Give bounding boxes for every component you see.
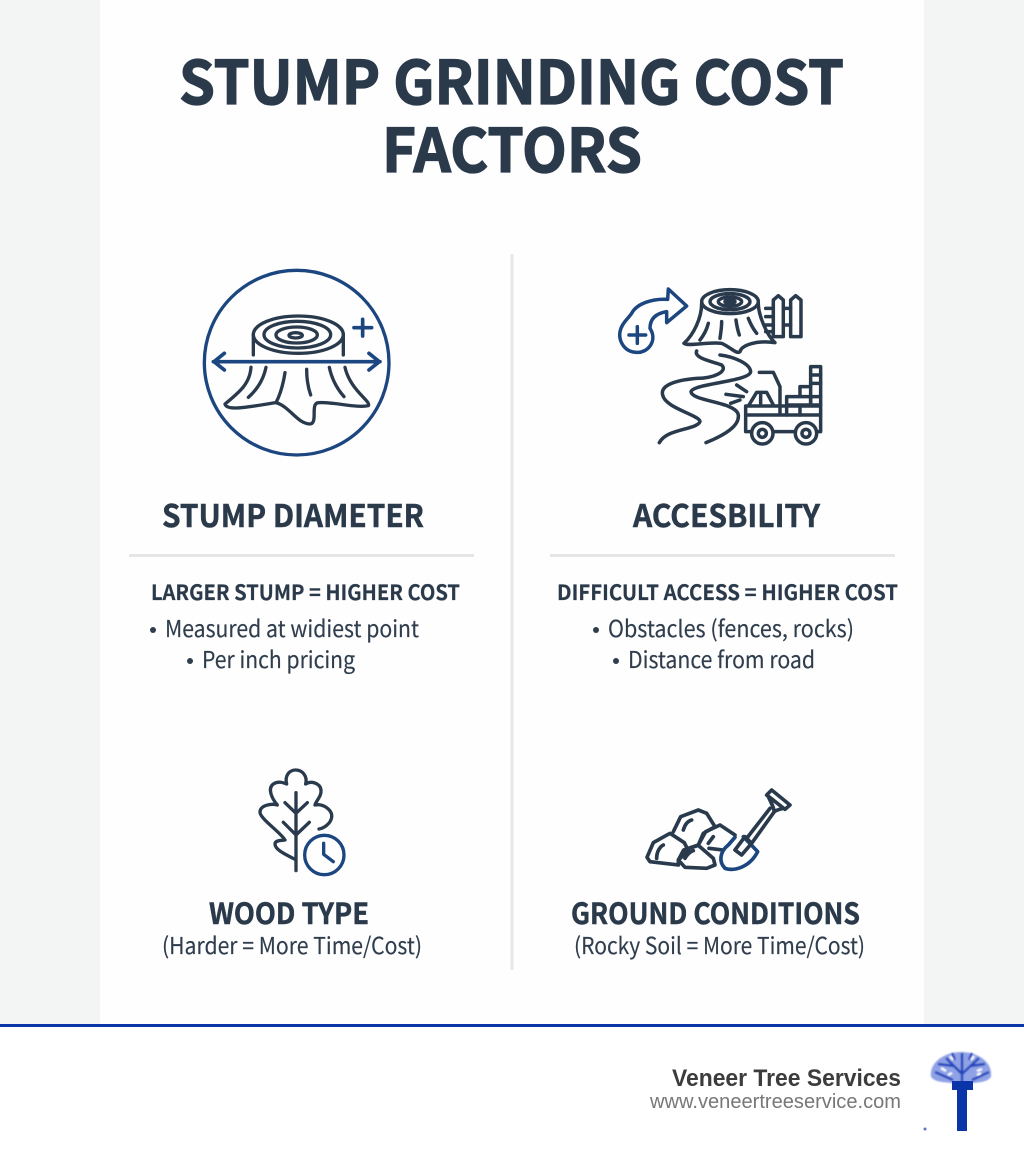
panel: stump diameter xyxy=(129,270,474,675)
title: STUMP GRINDING COST xyxy=(179,35,844,122)
icon: oak leaf with clock xyxy=(260,770,344,875)
icon: winding road, stump and truck xyxy=(620,289,821,444)
bullet list: stump diameter xyxy=(150,610,419,675)
title: FACTORS xyxy=(382,103,642,190)
heading: wood type: WOOD TYPE xyxy=(209,891,369,933)
icon: stump with diameter arrow xyxy=(204,270,389,455)
logo: blue tree xyxy=(924,1052,991,1131)
bullet list: accessibility xyxy=(593,610,854,675)
caption: wood type: (Harder = More Time/Cost) xyxy=(162,927,422,961)
heading: ground conditions: GROUND CONDITIONS xyxy=(571,891,860,933)
subheading: difficult access: DIFFICULT ACCESS = HIGHER COST xyxy=(557,577,898,607)
heading: accessibility: ACCESBILITY xyxy=(632,491,821,536)
footer xyxy=(0,1024,1024,1131)
subheading: larger stump: LARGER STUMP = HIGHER COST xyxy=(151,577,460,607)
title xyxy=(179,35,844,190)
bullet list: stump diameter: Measured at widiest point xyxy=(165,610,419,644)
company name: Veneer Tree Services xyxy=(672,1065,901,1092)
icon: rocks and shovel xyxy=(647,790,790,869)
heading: stump diameter: STUMP DIAMETER xyxy=(162,491,424,536)
panel: wood type xyxy=(162,770,422,961)
panel: ground conditions xyxy=(571,790,865,961)
caption: ground conditions: (Rocky Soil = More Time/Cost) xyxy=(574,927,865,961)
bullet list: stump diameter: Per inch pricing xyxy=(202,641,355,675)
panel: accessibility xyxy=(550,289,898,675)
bullet list: accessibility: Distance from road xyxy=(628,641,815,675)
website: www.veneertreeservice.com xyxy=(649,1091,901,1113)
bullet list: accessibility: Obstacles (fences, rocks) xyxy=(608,610,854,644)
